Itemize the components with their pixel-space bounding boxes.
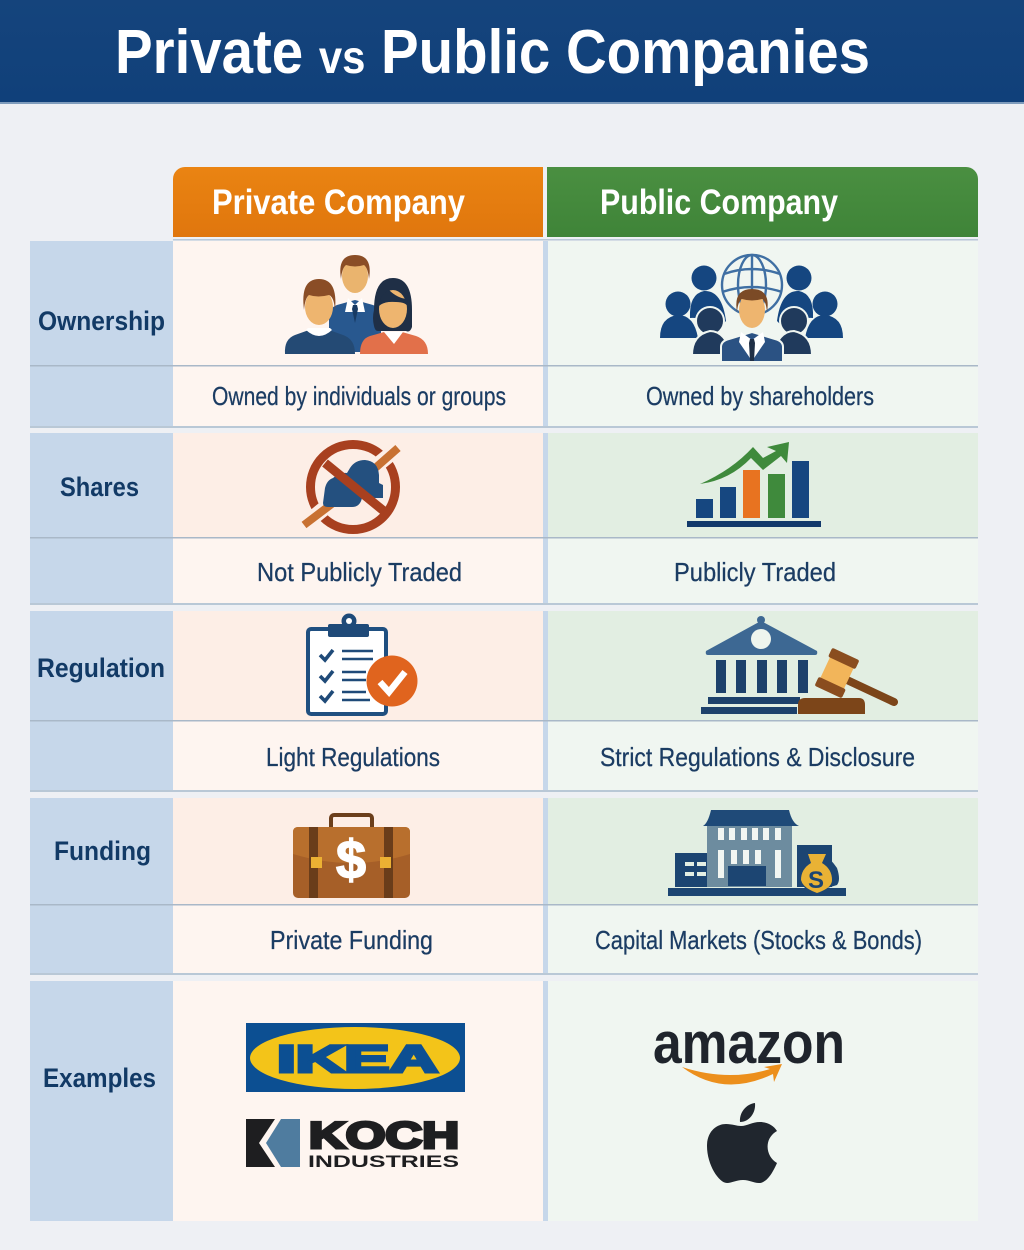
text: owned by individuals or groups: Owned by individuals or groups bbox=[212, 381, 506, 411]
text: owned by shareholders: Owned by shareholders bbox=[646, 381, 874, 411]
row: shares bbox=[30, 433, 978, 605]
text: publicly traded: Publicly Traded bbox=[674, 557, 836, 587]
icon: shareholders with globe bbox=[660, 255, 843, 362]
title banner bbox=[0, 0, 1024, 104]
icon: clipboard with checkmark bbox=[308, 614, 418, 714]
icon: three owners bbox=[285, 255, 428, 354]
icon: briefcase with dollar sign bbox=[293, 815, 410, 898]
text: not publicly traded: Not Publicly Traded bbox=[257, 557, 462, 587]
row: funding bbox=[30, 798, 978, 975]
column header: private company bbox=[173, 167, 543, 237]
icon: no shares prohibited sign bbox=[304, 444, 398, 530]
text: light regulations: Light Regulations bbox=[266, 742, 440, 772]
label: regulation: Regulation bbox=[37, 653, 165, 683]
label: ownership: Ownership bbox=[38, 306, 165, 336]
text: strict regulations and disclosure: Strict Regulations & Disclosure bbox=[600, 742, 915, 772]
icon: courthouse and gavel bbox=[701, 616, 894, 714]
icon: rising bar chart bbox=[687, 442, 821, 527]
logo: koch industries: INDUSTRIES bbox=[308, 1152, 459, 1171]
logo: apple bbox=[707, 1103, 777, 1183]
logo: amazon: amazon bbox=[653, 1011, 845, 1076]
title: Private vs Public Companies bbox=[115, 18, 870, 87]
logo: koch industries bbox=[246, 1115, 459, 1171]
row: ownership bbox=[30, 239, 978, 428]
text: private funding: Private Funding bbox=[270, 925, 433, 955]
text: capital markets: Capital Markets (Stocks & Bonds) bbox=[595, 925, 922, 955]
column header: public company bbox=[547, 167, 978, 237]
icon: corporate building with money bag bbox=[668, 810, 846, 896]
label: shares: Shares bbox=[60, 472, 139, 502]
column header: private company: Private Company bbox=[212, 183, 465, 222]
row: regulation bbox=[30, 611, 978, 792]
logo: koch industries: KOCH bbox=[309, 1115, 459, 1156]
row: examples bbox=[30, 981, 978, 1221]
icon: corporate building with money bag: S bbox=[808, 867, 824, 894]
logo: ikea bbox=[246, 1023, 465, 1092]
icon: briefcase with dollar sign: $ bbox=[336, 830, 366, 890]
label: examples: Examples bbox=[43, 1063, 156, 1093]
logo: ikea: IKEA bbox=[277, 1039, 438, 1081]
label: funding: Funding bbox=[54, 836, 151, 866]
column header: public company: Public Company bbox=[600, 183, 838, 222]
